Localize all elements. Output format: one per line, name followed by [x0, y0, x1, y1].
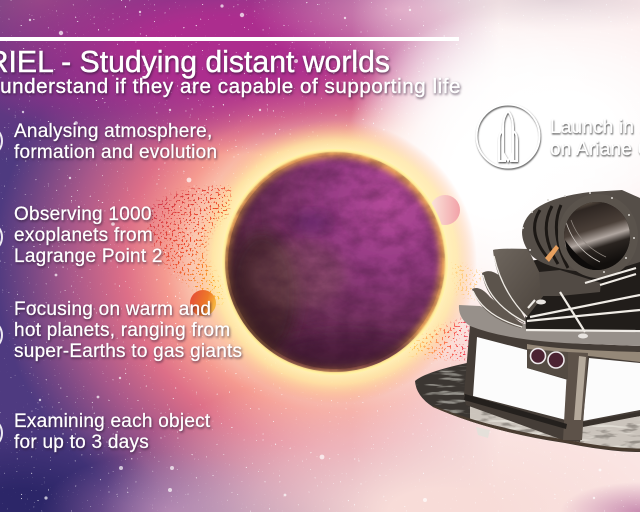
corner strut reflection	[574, 356, 586, 420]
dark deck under telescope	[522, 245, 640, 332]
left white panel	[473, 337, 568, 420]
right white panel	[583, 358, 640, 421]
bullet: duration: Examining each object	[14, 411, 211, 432]
bullet: planet range	[0, 299, 242, 362]
bullet icon arc	[0, 320, 2, 350]
chrome band highlight	[527, 344, 640, 362]
bullet: atmosphere	[0, 121, 217, 163]
v-groove shield vanes	[472, 249, 548, 328]
small orange planet	[190, 290, 216, 316]
bullet: planet range: hot planets, ranging from	[14, 320, 230, 341]
lens plate	[527, 349, 568, 379]
particle cloud right	[408, 262, 482, 360]
bipod struts	[526, 268, 640, 332]
gold harness detail	[545, 245, 559, 262]
bullet: atmosphere: formation and evolution	[14, 142, 217, 163]
planet glow	[193, 120, 477, 404]
bullet: planet range: Focusing on warm and	[14, 299, 211, 320]
right lower stripe	[583, 412, 640, 427]
twin lenses	[530, 348, 564, 368]
bullet icon arc	[0, 418, 2, 448]
top deck	[459, 305, 640, 346]
bullet: exoplanets: Lagrange Point 2	[14, 246, 163, 267]
deck strut feet	[536, 300, 588, 338]
bullet icon arc	[0, 126, 2, 156]
icon: rocket in circle	[476, 104, 540, 168]
bullet: duration: for up to 3 days	[14, 432, 149, 453]
planet	[222, 149, 448, 375]
bullet: planet range: super-Earths to gas giants	[14, 341, 242, 362]
bullet: exoplanets: exoplanets from	[14, 225, 153, 246]
instrument block	[539, 270, 601, 296]
lower thermal disc	[415, 363, 640, 452]
corner strut	[563, 352, 588, 440]
telescope baffle	[522, 190, 640, 278]
spacecraft	[410, 190, 640, 455]
lower bay stripe	[464, 394, 567, 429]
title rule	[0, 37, 459, 41]
instrument bay body	[464, 325, 640, 442]
bullet icon arc	[0, 222, 2, 252]
small pink planet	[430, 195, 460, 225]
lower bracket	[476, 427, 490, 438]
bullet: exoplanets: Observing 1000	[14, 204, 152, 225]
bullet: duration	[0, 411, 211, 453]
particle cloud left	[147, 185, 232, 305]
bullet: exoplanets	[0, 204, 163, 267]
bullet: atmosphere: Analysing atmosphere,	[14, 121, 213, 142]
